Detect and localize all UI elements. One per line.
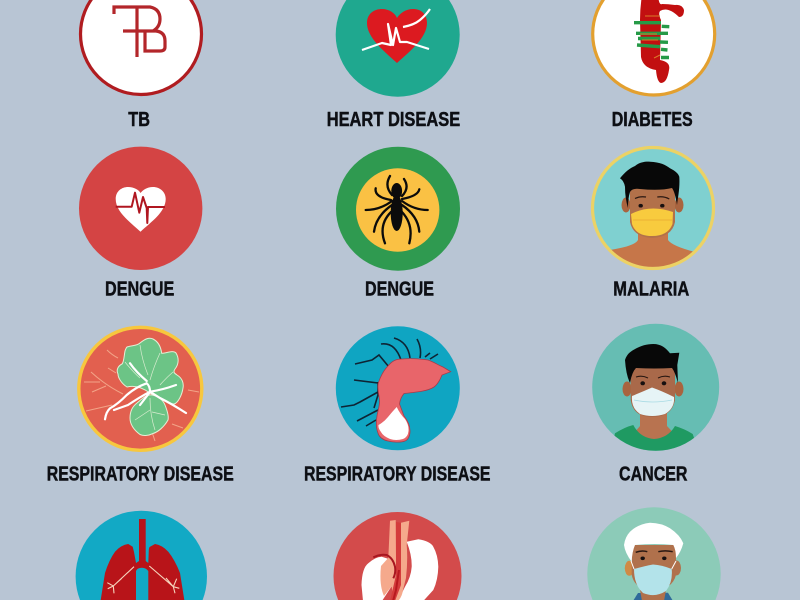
panel: kidneys — [334, 512, 462, 600]
icon: heart with ECG line — [336, 0, 460, 97]
label: diabetes: DIABETES — [612, 109, 693, 131]
label: respiratory disease: RESPIRATORY DISEASE — [47, 464, 234, 486]
icon: tick on yellow disc — [336, 147, 460, 271]
label: dengue: DENGUE — [105, 279, 174, 301]
panel: respiratory disease, leaf — [47, 327, 234, 486]
panel: malaria — [592, 148, 714, 301]
panel: dengue, heart — [79, 147, 202, 301]
panel: diabetes — [593, 0, 715, 131]
label: heart disease: HEART DISEASE — [327, 109, 460, 131]
label: TB: TB — [128, 109, 150, 131]
label: dengue: DENGUE — [365, 279, 434, 301]
label: malaria: MALARIA — [613, 279, 689, 301]
icon: kidneys with vessels — [334, 512, 462, 600]
icon: TB monogram — [80, 0, 202, 94]
label: cancer: CANCER — [619, 464, 688, 486]
icon: red organ with green bands — [593, 0, 715, 95]
panel: dengue, tick — [336, 147, 460, 301]
panel: cancer — [592, 324, 719, 486]
icon: person with white mask — [592, 324, 719, 455]
panel: lungs — [76, 511, 207, 600]
icon: person with yellow mask — [592, 148, 714, 275]
panel: heart disease — [327, 0, 460, 131]
icon: red lungs — [76, 511, 207, 600]
icon: green leaf-like lung with veins — [79, 327, 202, 450]
label: respiratory disease: RESPIRATORY DISEASE — [304, 464, 490, 486]
panel: respiratory disease, organ — [304, 326, 490, 486]
icon: white-haired person with mask — [587, 507, 721, 600]
panel: TB — [80, 0, 202, 131]
icon: red organ with black veins — [336, 326, 460, 450]
icon: white heart with pulse — [79, 147, 202, 270]
panel: doctor — [587, 507, 721, 600]
